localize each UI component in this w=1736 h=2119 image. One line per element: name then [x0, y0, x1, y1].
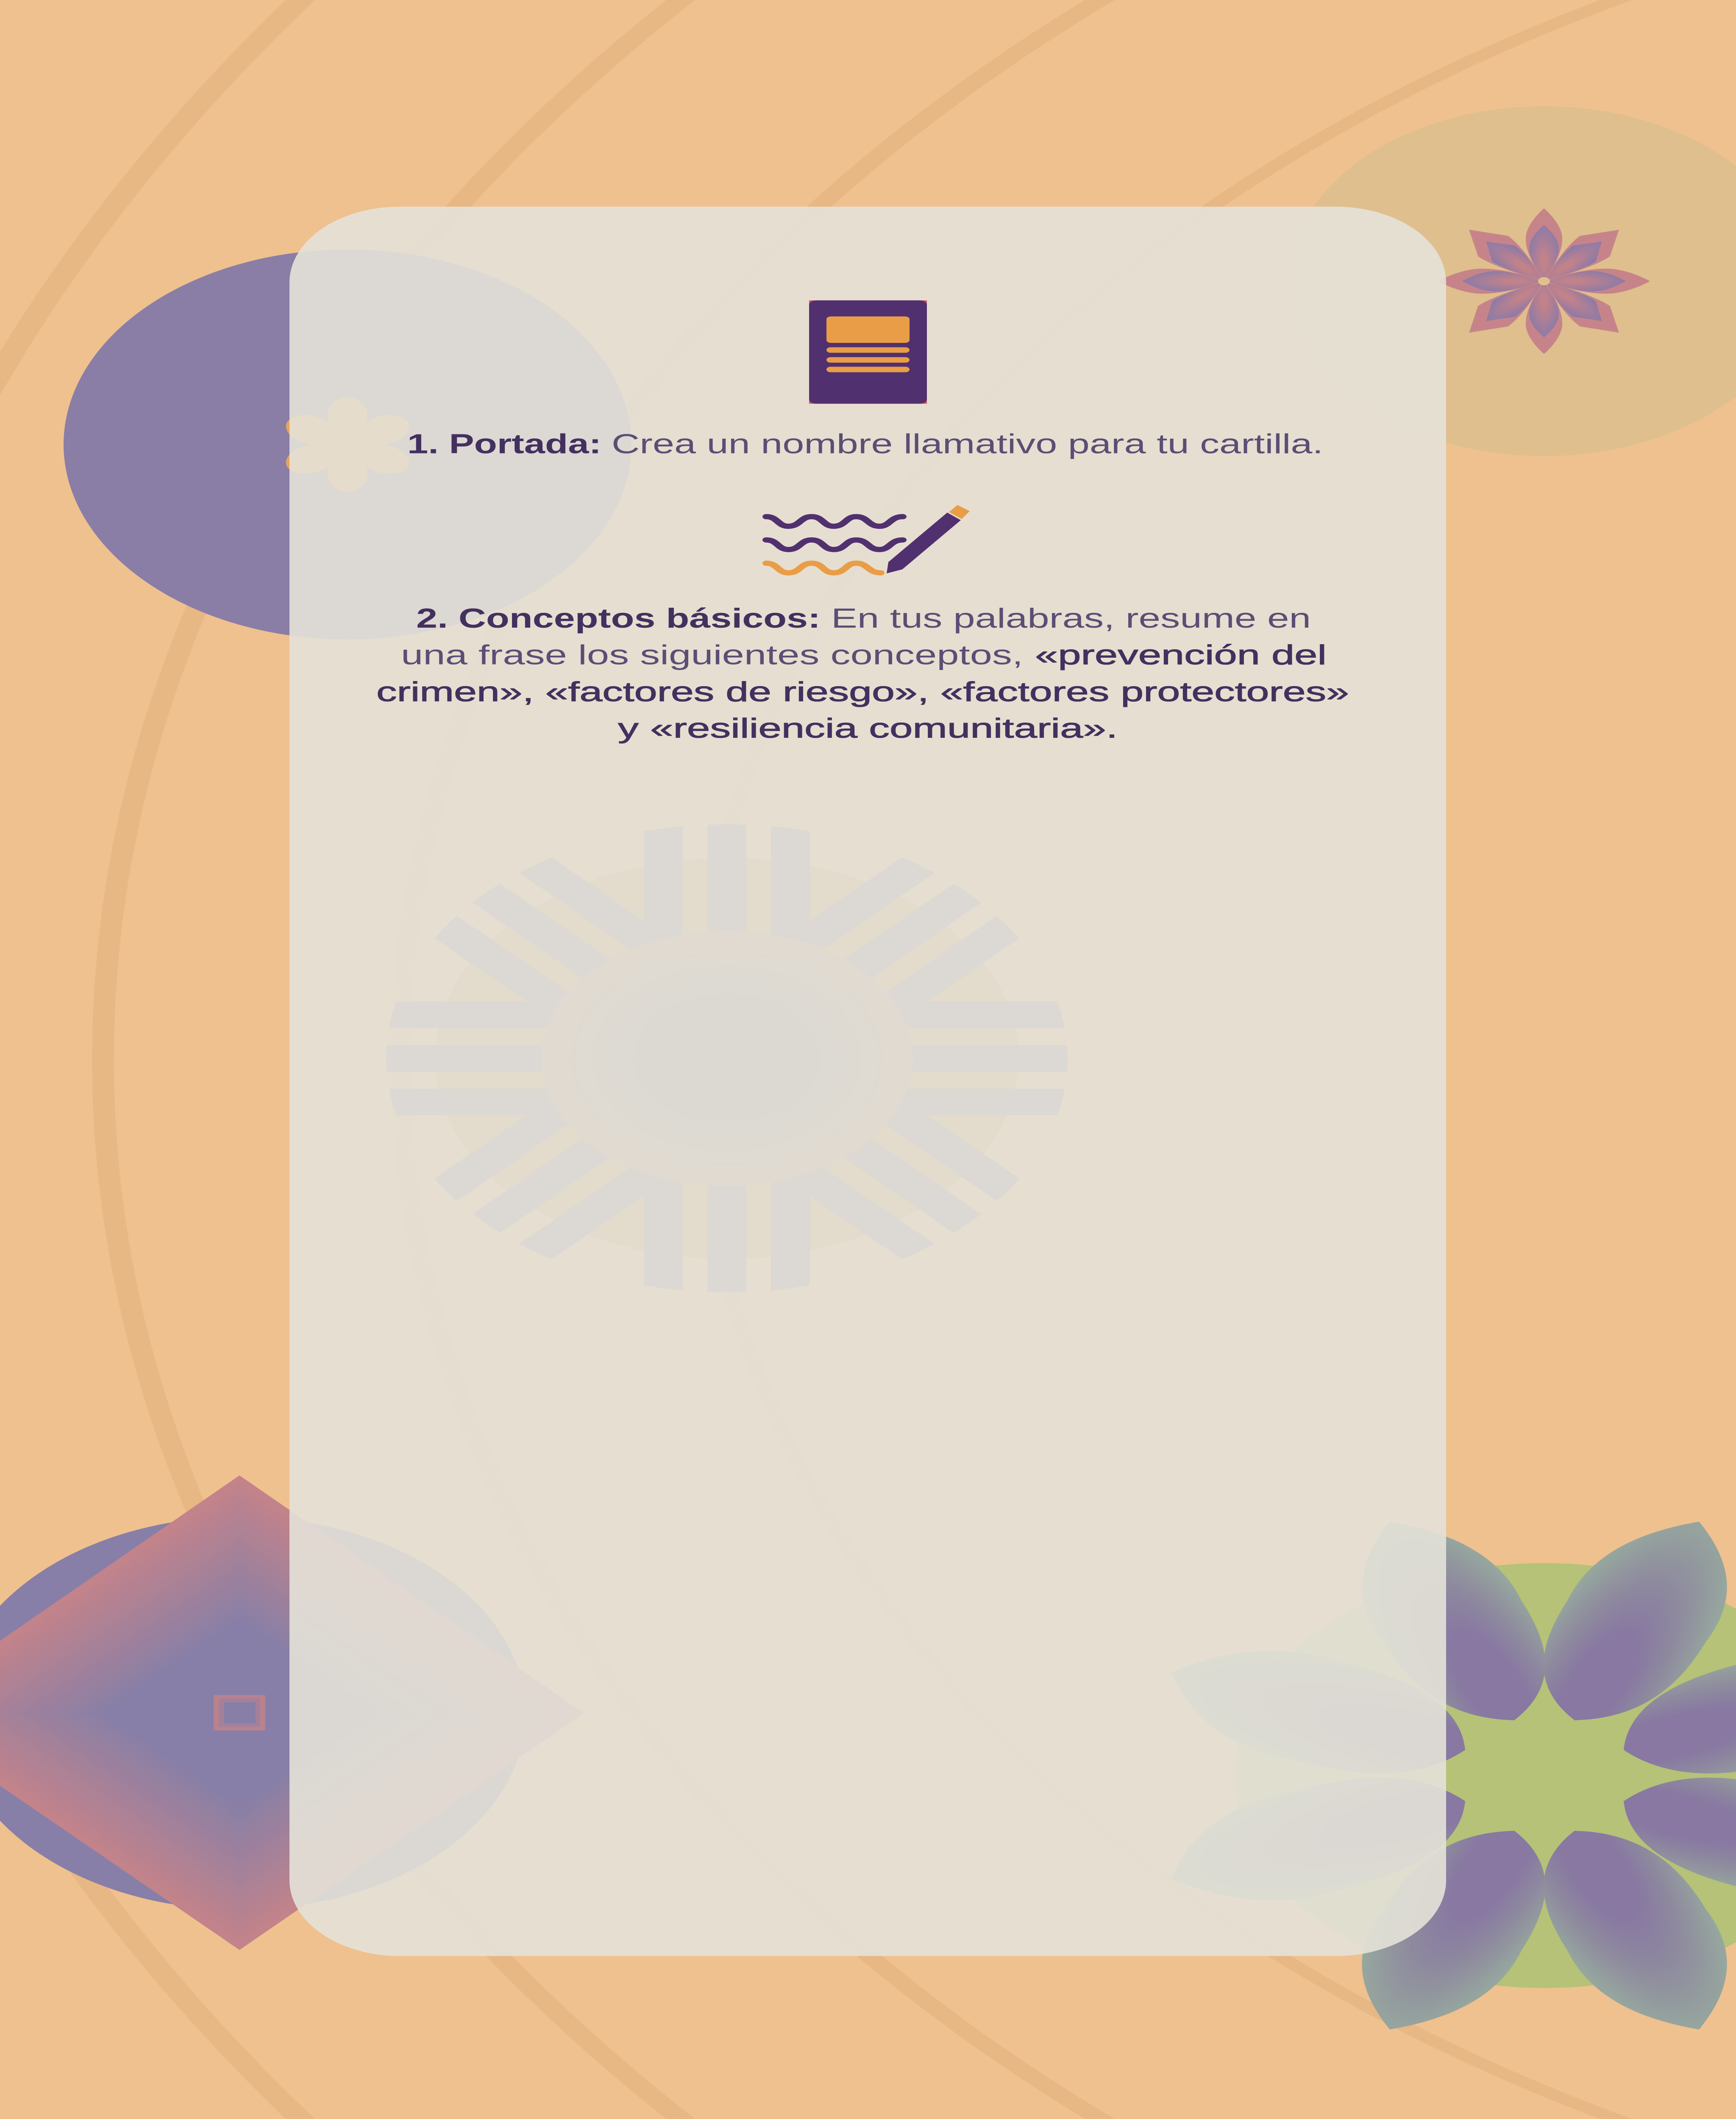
- text: step 1: Crea un nombre llamativo para tu cartilla.: [612, 429, 1323, 459]
- decoration: bottom-left gradient diamond: [0, 1475, 584, 1950]
- text: step 2: 2. Conceptos básicos:: [416, 603, 821, 634]
- text: step 2: y «resiliencia comunitaria».: [618, 713, 1118, 744]
- text: step 2: [376, 603, 1349, 744]
- text: step 2: una frase los siguientes conceptos,: [401, 640, 1023, 670]
- decoration: bottom-left disc: [0, 1517, 526, 1910]
- text: step 2: «prevención del: [1035, 640, 1327, 670]
- icon: top-right eight-petal flower: [1438, 209, 1650, 354]
- decoration: bottom-right green disc: [1235, 1563, 1736, 1988]
- text: step 2: En tus palabras, resume en: [831, 603, 1311, 634]
- text: step 2: crimen», «factores de riesgo», «factores protectores»: [376, 677, 1349, 707]
- icon: wavy lines and pencil: [766, 505, 970, 573]
- decoration: central sun emblem: [384, 823, 1070, 1294]
- icon: booklet cover: [809, 300, 927, 404]
- icon: small six-petal flower: [278, 398, 417, 492]
- decoration: top-right disc: [1289, 106, 1736, 456]
- panel: main translucent card: [289, 207, 1446, 1956]
- text: step 1: 1. Portada:: [407, 429, 601, 459]
- decoration: upper-left purple disc: [64, 250, 632, 640]
- icon: bottom-right eight-leaf flower: [1144, 1501, 1736, 2050]
